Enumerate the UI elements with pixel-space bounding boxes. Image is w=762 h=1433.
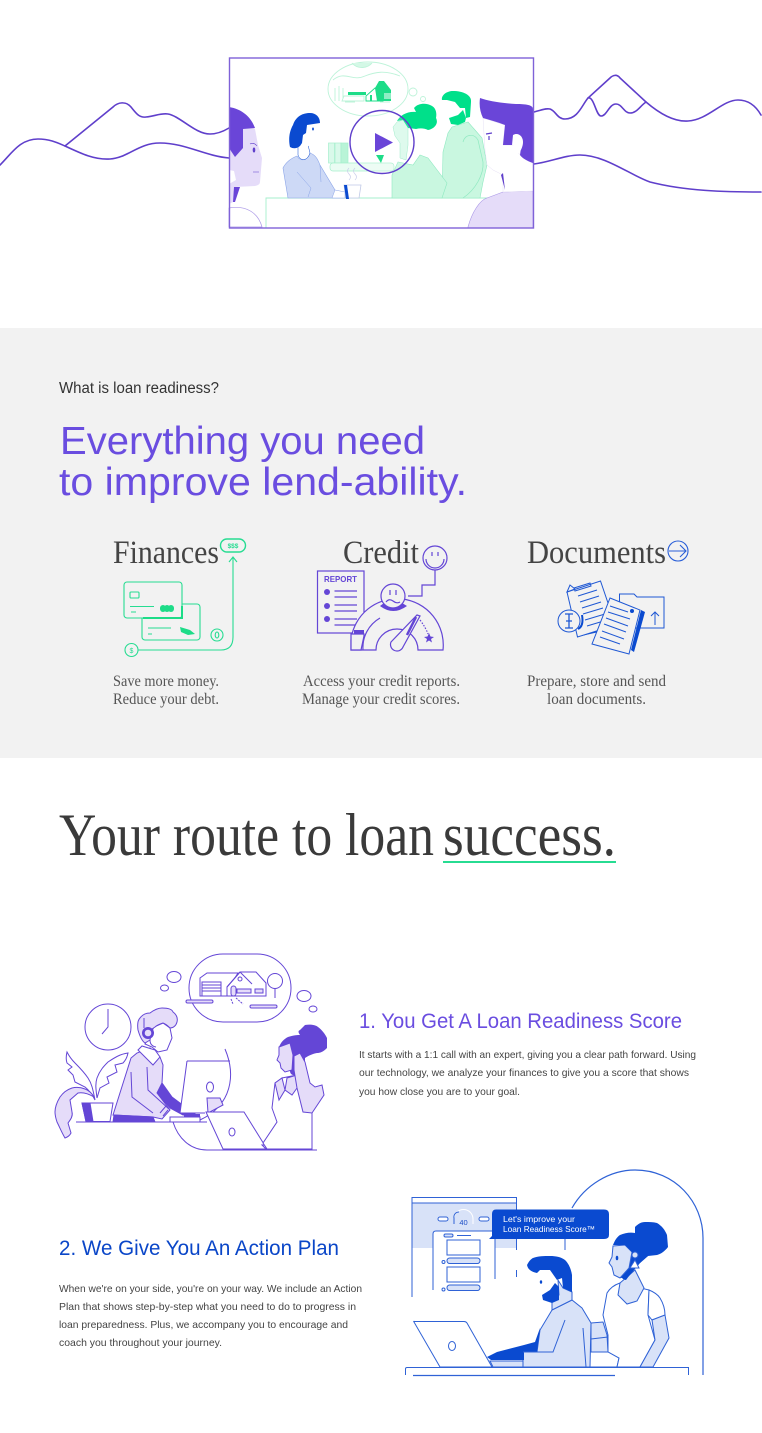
documents title: Documents (527, 535, 666, 571)
step 2 paragraph (59, 1284, 362, 1349)
app window: 40 (459, 1218, 468, 1227)
credit description: Access your credit reports. (303, 673, 460, 690)
step 2 paragraph: Plan that shows step-by-step what you need to do to progress in (59, 1302, 356, 1313)
laptop (206, 1112, 290, 1150)
coffee cup (344, 168, 361, 199)
panel: what is loan readiness (0, 328, 762, 758)
section heading (59, 420, 467, 504)
section heading: Everything you need (60, 420, 425, 463)
step 1 paragraph: our technology, we analyze your finances to give you a score that shows (359, 1068, 689, 1079)
step 1 paragraph: you how close you are to your goal. (359, 1087, 520, 1098)
illustration: action plan (406, 1170, 703, 1376)
woman on phone (263, 1025, 327, 1149)
credit description: Manage your credit scores. (302, 691, 460, 708)
app window (412, 1198, 517, 1297)
step 2 heading: 2. We Give You An Action Plan (59, 1237, 339, 1260)
icon: report and credit gauge (318, 546, 447, 651)
eyebrow text: What is loan readiness? (59, 380, 219, 397)
column: credit (302, 535, 460, 708)
documents description (527, 673, 666, 708)
hero: mountain line left (0, 103, 229, 165)
main heading: Your route to loan (59, 802, 434, 868)
callout bubble (489, 1210, 609, 1250)
documents description: Prepare, store and send (527, 673, 666, 690)
icon: report and credit gauge: REPORT (324, 575, 357, 584)
man with headset (113, 1008, 195, 1122)
clock (85, 1004, 131, 1050)
laptop (414, 1321, 523, 1367)
seated man (487, 1256, 591, 1367)
step 2 paragraph: loan preparedness. Plus, we accompany you to encourage and (59, 1320, 348, 1331)
desk and monitor (76, 1049, 317, 1150)
section heading: to improve lend-ability. (59, 461, 467, 504)
green man (442, 91, 487, 198)
credit description (302, 673, 460, 708)
desk (406, 1368, 688, 1376)
finances description: Reduce your debt. (113, 691, 219, 708)
callout bubble: Loan Readiness Score™ (503, 1224, 595, 1234)
play button (350, 110, 414, 174)
icon: cards and money arrow: $ (130, 648, 134, 655)
main heading: success. (443, 802, 616, 868)
standing woman (590, 1222, 669, 1367)
documents description: loan documents. (547, 691, 646, 708)
icon: documents and folder (558, 581, 664, 654)
step 2 text (59, 1237, 362, 1349)
step 1 paragraph (359, 1050, 696, 1098)
step 1 text (359, 1010, 696, 1098)
finances description: Save more money. (113, 673, 219, 690)
thought bubble with house (328, 62, 426, 116)
video thumbnail (229, 58, 534, 228)
right man (468, 98, 533, 228)
callout bubble: Let's improve your (503, 1214, 575, 1224)
arch (572, 1170, 703, 1375)
step 2 paragraph: When we're on your side, you're on your way. We include an Action (59, 1284, 362, 1295)
illustration: score call (55, 954, 327, 1150)
green haired woman (392, 104, 447, 198)
credit title: Credit (343, 535, 419, 571)
icon: arrow circle (668, 541, 688, 561)
books and shelf (328, 143, 394, 171)
step 1 heading: 1. You Get A Loan Readiness Score (359, 1010, 682, 1033)
blue haired woman (283, 113, 345, 198)
icon: cards and money arrow (124, 539, 246, 656)
step 2 paragraph: coach you throughout your journey. (59, 1338, 222, 1349)
step 1 paragraph: It starts with a 1:1 call with an expert, giving you a clear path forward. Using (359, 1050, 696, 1061)
thought bubble with house (160, 954, 317, 1022)
icon: cards and money arrow: $$$ (228, 543, 239, 550)
plant (55, 1052, 128, 1138)
hero: mountain line right (534, 75, 761, 192)
column: documents (527, 535, 688, 708)
table (266, 198, 494, 228)
finances description (113, 673, 219, 708)
left man (229, 107, 262, 227)
finances title: Finances (113, 535, 219, 571)
column: finances (113, 535, 246, 708)
